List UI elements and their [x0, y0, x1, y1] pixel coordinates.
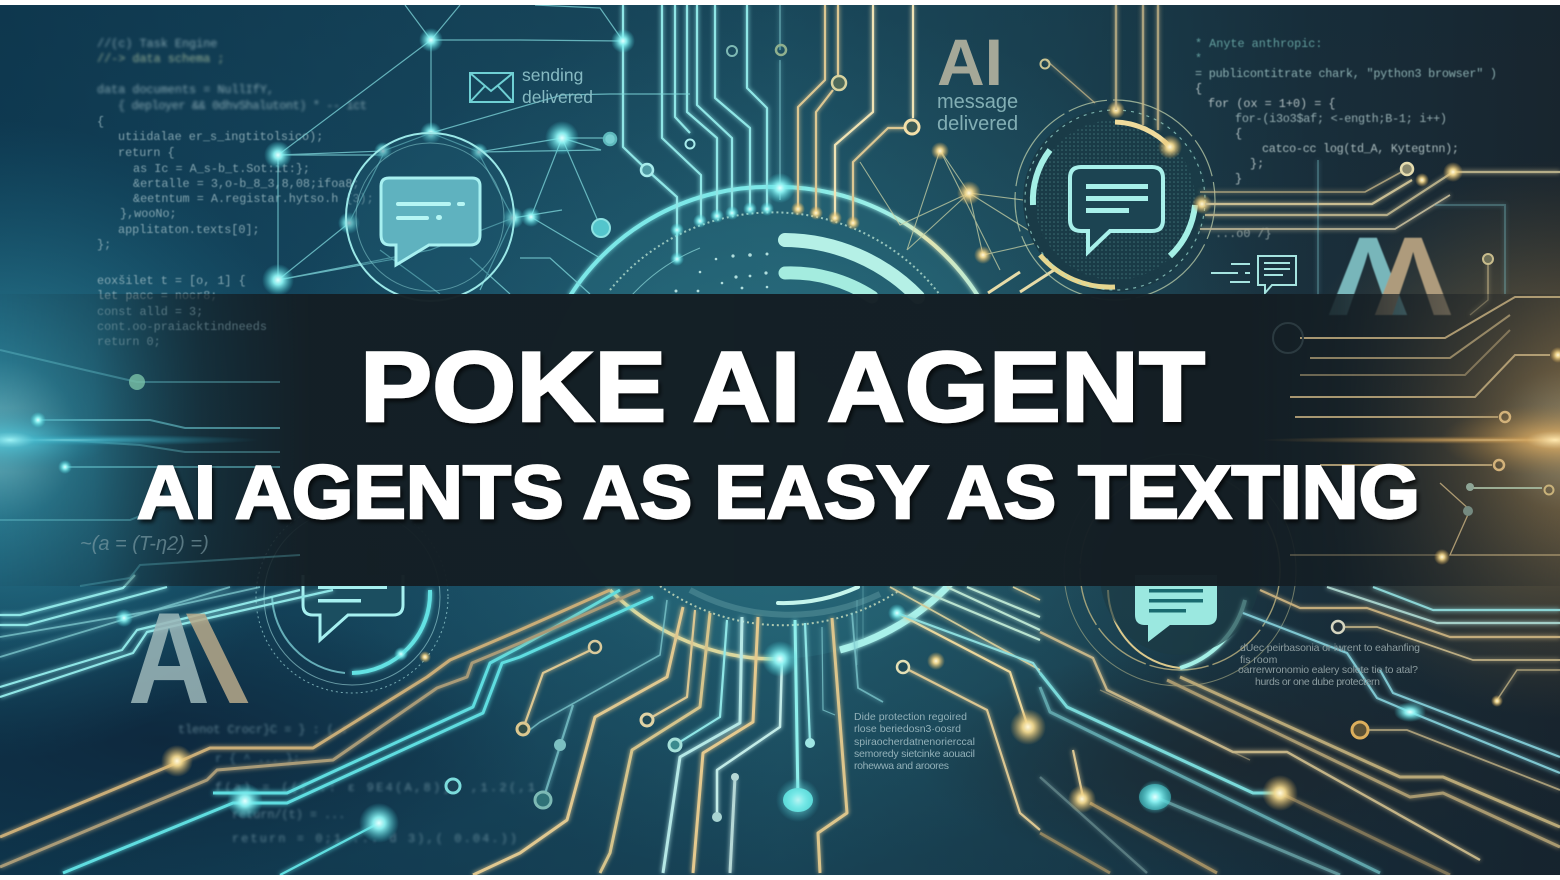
text block: data protection: rlose beriedosn3·oosrd: [854, 723, 961, 735]
title line 1: POKE AI AGENT: [360, 331, 1205, 442]
code block: top left: &eetntum = A.registar.hytso.h {3);: [133, 192, 374, 206]
top circuit traces: teal: [623, 5, 780, 258]
label: sending delivered: [522, 68, 592, 103]
code block: bottom left: return = 0;1 ... d 3),( 0.04.)): [232, 832, 517, 846]
label: AI message delivered: [938, 40, 1018, 130]
icon: left chat circle: [346, 133, 514, 301]
hub dots: [674, 252, 768, 292]
code block: top left: let pacc = nocr8;: [97, 289, 217, 303]
bottom circuit traces: right: [890, 587, 1560, 875]
text block: data protection: rohewwa and aroores: [854, 760, 949, 772]
code block: top left: applitaton.texts[0];: [118, 223, 260, 237]
code block: top left: &ertalle = 3,o-b_8_3,8,08;ifoa8;: [133, 177, 360, 191]
left flare: [0, 414, 244, 466]
code block: top right: * Anyte anthropic:: [1195, 37, 1322, 51]
label: AI message delivered: message: [937, 91, 1018, 113]
code block: top left: {: [97, 115, 104, 129]
bottom left AI mark: [130, 614, 248, 703]
formula: ~(a = (T-η2) =): [80, 533, 209, 555]
text block: right note: [1238, 642, 1420, 688]
label: AI message delivered: AI: [937, 25, 1003, 99]
bottom chat circle: right: [1064, 547, 1296, 686]
hub inner thick arcs: [785, 240, 918, 297]
top right nodes: [1040, 60, 1493, 264]
bottom left AI mark: A: [128, 585, 210, 731]
network nodes: [262, 28, 635, 296]
label: sending delivered: sending: [522, 65, 583, 85]
code block: bottom left: tlenot Crocr}C = } : ( :: [178, 723, 348, 737]
text block: right note: dUec peirbasonia or iwrent to eahanfing: [1240, 642, 1420, 654]
code block: top left: return {: [118, 146, 175, 160]
bottom chat circle: left: [256, 526, 448, 694]
chat bubble: [1070, 167, 1163, 252]
text block: right note: fis room: [1240, 654, 1278, 666]
text block: data protection: spiraocherdatnenorierccal: [854, 736, 975, 748]
code block: top left: eoxšilet t = [o, 1] {: [97, 274, 246, 288]
code block: top right: *: [1195, 52, 1202, 66]
code block: top left: //(c) Task Engine: [97, 37, 217, 51]
code block: bottom left: [178, 723, 535, 846]
bottom nodes: [115, 604, 1503, 843]
bottom circuit traces: left teal: [0, 575, 653, 875]
code block: top right: catco-cc log(td_A, Kytegtnn);: [1262, 142, 1459, 156]
code block: top right: {: [1195, 82, 1202, 96]
code block: top right: for (ox = 1+0) = {: [1208, 97, 1335, 111]
text block: right note: oarrerwronomio ealery solete tie to atal?: [1238, 664, 1418, 676]
network graph: right: [860, 142, 1054, 294]
code block: in band: cont.oo-praiacktindneeds: [97, 320, 267, 334]
trace terminal nodes: [641, 45, 919, 266]
logo: M mark: Λ: [1374, 214, 1452, 339]
bottom circuit traces: left gold: [0, 590, 710, 875]
logo: M mark: [1329, 237, 1452, 316]
code block: top right: = publicontitrate chark, "python3 browser" ): [1195, 67, 1497, 81]
text block: data protection: Dide protection regoired: [854, 711, 967, 723]
text block: data protection: semoredy sietcinke aouacil: [854, 748, 975, 760]
code block: top left: },wooNo;: [120, 207, 177, 221]
hub arcs: [570, 187, 978, 659]
title band: [0, 294, 1560, 586]
top circuit traces: gold: [798, 5, 913, 222]
code block: in band: return 0;: [97, 335, 161, 349]
side traces: left: [0, 305, 300, 586]
code block: top right: ...o0 /}: [1215, 227, 1272, 241]
code block: bottom left: r { ^ ... };: [215, 752, 300, 766]
right flare: [1260, 404, 1560, 476]
side traces: right: [1260, 297, 1560, 565]
code block: top left: data documents = NullIfY,: [97, 83, 274, 97]
code block: top right: [1195, 37, 1497, 241]
text block: data protection: [854, 711, 975, 772]
central hub: [539, 187, 1011, 659]
icon: small message: [1211, 256, 1296, 293]
label: AI message delivered: delivered: [937, 113, 1018, 135]
icon: envelope: [470, 73, 513, 102]
icon: right chat circle: [1015, 100, 1215, 300]
bottom left AI mark: I: [164, 587, 271, 731]
code block: in band: const alld = 3;: [97, 305, 203, 319]
code block: top left: };: [97, 238, 111, 252]
code block: top left: [97, 37, 374, 303]
code block: top right: }: [1235, 172, 1242, 186]
code block: top left: as Ic = A_s-b_t.Sot:it:};: [133, 162, 310, 176]
code block: top right: for-(i3o3$af; <-ength;B-1; i++): [1235, 112, 1447, 126]
code block: top left: { deployer && 0dhvShalutont) * -- ict: [118, 99, 367, 113]
title line 2: AI AGENTS AS EASY AS TEXTING: [137, 450, 1420, 534]
bottom circuit traces: centre: [663, 580, 1040, 873]
top right traces: [1046, 5, 1560, 315]
logo: M mark: Λ: [1328, 214, 1408, 339]
code block: bottom left: f(a) = ((f..: ε 9E4(A,8)]( ,1.2(,1: [215, 781, 535, 795]
code block: top right: {: [1235, 127, 1242, 141]
text block: right note: hurds or one dube protectern: [1255, 676, 1380, 688]
code block: in band: [97, 305, 267, 349]
title: [137, 331, 1420, 534]
label: sending delivered: delivered: [522, 87, 593, 107]
code block: top left: utiidalae er_s_ingtitolsico);: [118, 130, 323, 144]
code block: top right: };: [1250, 157, 1264, 171]
code block: top left: //-> data schema ;: [97, 52, 224, 66]
network graph: left: [262, 5, 690, 296]
code block: bottom left: return/(t) = ...: [232, 808, 345, 822]
